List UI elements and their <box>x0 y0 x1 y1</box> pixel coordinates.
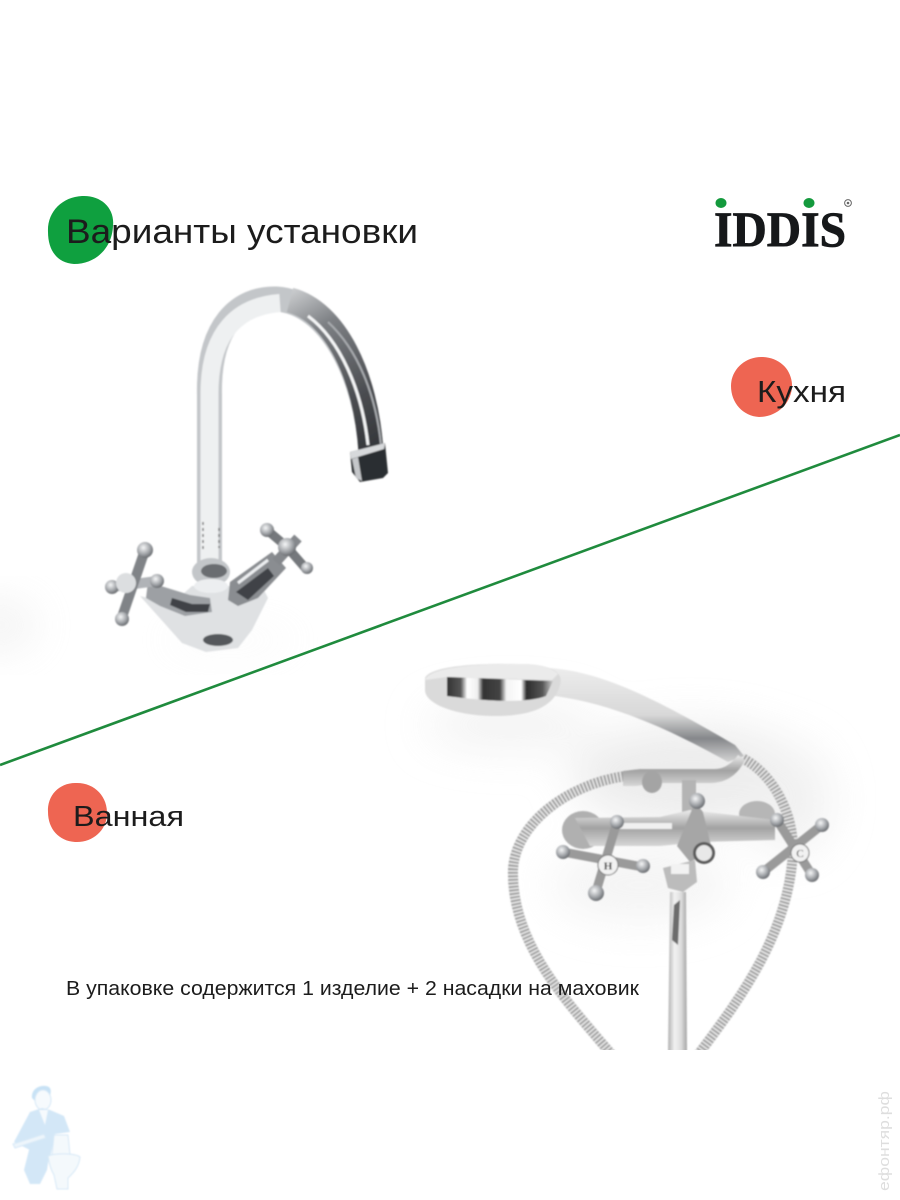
spout <box>668 892 687 1055</box>
chrome band <box>447 677 553 701</box>
bathroom text: Ванная <box>73 801 184 833</box>
spout reflection <box>672 900 680 945</box>
package contents note: В упаковке содержится 1 изделие + 2 насадки на маховик <box>66 978 639 1000</box>
kitchen text: Кухня <box>757 374 846 409</box>
drain opening <box>203 634 233 646</box>
faucet dark right arc <box>290 300 371 452</box>
left arm shading <box>170 598 210 612</box>
handle H: H <box>604 860 613 872</box>
nozzle <box>350 443 388 482</box>
handle C <box>756 813 829 882</box>
faucet arc spout base <box>209 299 371 570</box>
heading: installation options <box>48 196 418 264</box>
registered mark <box>845 200 851 206</box>
wrench <box>13 1134 46 1148</box>
right handle <box>260 523 313 574</box>
shower handle <box>550 668 744 762</box>
right flange <box>738 800 776 820</box>
mixer body highlight <box>612 823 672 829</box>
right arm shading <box>236 568 274 600</box>
toilet bowl <box>48 1154 80 1189</box>
faucet body <box>140 586 268 652</box>
left hose <box>513 776 625 1055</box>
divider line <box>0 435 900 765</box>
soft shadow behind kitchen faucet <box>0 603 300 648</box>
label: kitchen <box>731 357 846 417</box>
riser <box>682 780 696 820</box>
kitchen faucet <box>105 299 388 652</box>
plumber torso <box>14 1108 70 1160</box>
right hose <box>698 758 793 1055</box>
mixer body <box>575 810 775 846</box>
spout collar shine <box>671 864 689 874</box>
right arm highlight <box>238 560 268 583</box>
vertical site watermark: ефонтяр.рф <box>876 1091 893 1191</box>
logo dots <box>716 198 814 208</box>
label: bathroom <box>48 783 184 842</box>
arc highlights <box>308 316 381 445</box>
plumber hair <box>32 1086 51 1102</box>
mount clip <box>642 771 662 793</box>
logo: IDDIS <box>714 198 851 257</box>
faucet stem and left arc highlight <box>209 303 280 570</box>
stem reflections <box>203 522 219 552</box>
handle C: C <box>796 848 804 860</box>
plumber shirt <box>39 1110 48 1125</box>
spout collar <box>663 860 697 892</box>
left handle <box>105 542 164 626</box>
handle H <box>556 815 650 901</box>
centre switch <box>677 793 715 864</box>
red blob <box>48 783 107 842</box>
green blob <box>48 196 113 264</box>
shower set <box>425 664 829 1055</box>
plumber legs <box>24 1146 50 1184</box>
plumber head <box>35 1090 51 1110</box>
toilet tank <box>52 1135 70 1155</box>
right arm <box>228 552 286 606</box>
left flange <box>562 811 604 849</box>
red blob <box>731 357 792 417</box>
soft shadow behind shower set <box>466 712 824 908</box>
shower head <box>425 664 561 716</box>
heading text: Варианты установки <box>66 213 418 251</box>
shower head top <box>425 664 558 680</box>
mount bar <box>623 755 745 786</box>
plumber watermark <box>13 1086 80 1189</box>
left arm <box>146 582 212 616</box>
collar <box>192 558 230 593</box>
logo wordmark: IDDIS <box>714 201 846 257</box>
